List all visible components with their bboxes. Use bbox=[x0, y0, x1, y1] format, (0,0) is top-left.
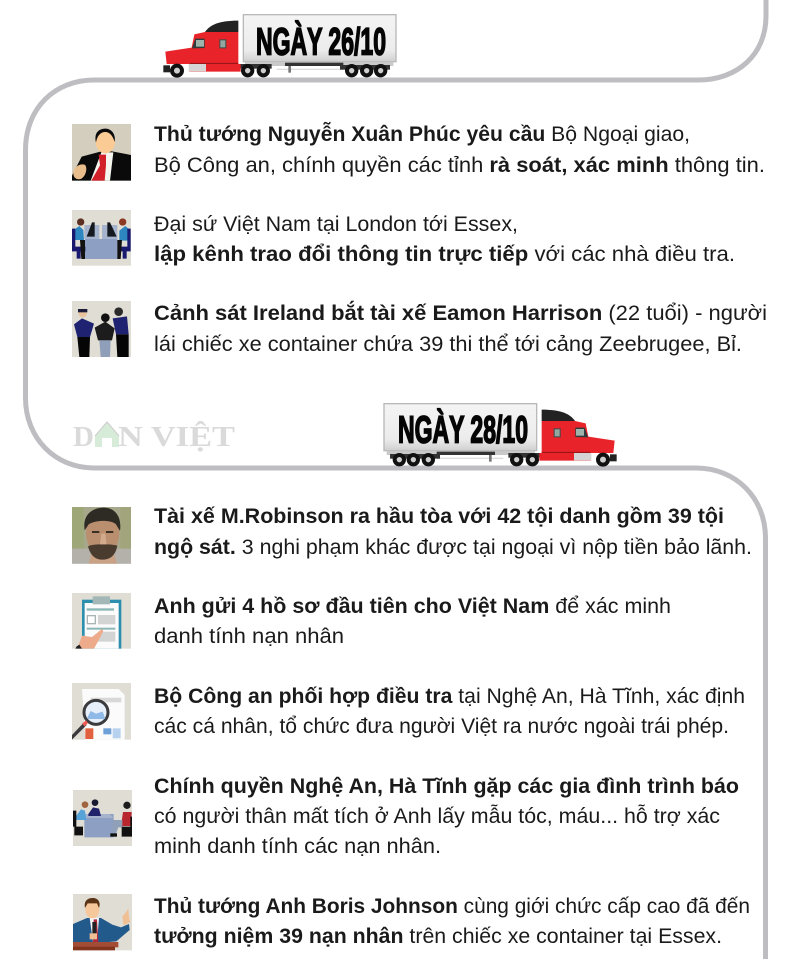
text: cảnh sát ireland bbox=[154, 300, 767, 356]
text: thủ tướng yêu cầu: Thủ tướng Nguyễn Xuân Phúc yêu cầu Bộ Ngoại giao, bbox=[154, 121, 690, 146]
text: đại sứ việt nam bbox=[154, 212, 735, 266]
text: chính quyền nghệ an bbox=[154, 774, 739, 858]
icon: meeting with families bbox=[73, 790, 132, 846]
icon: Boris Johnson speaking bbox=[73, 894, 132, 950]
text: anh gửi 4 hồ sơ bbox=[154, 594, 671, 648]
icon: prime minister in suit bbox=[72, 124, 131, 181]
text: cảnh sát ireland: Cảnh sát Ireland bắt tài xế Eamon Harrison (22 tuổi) - người bbox=[154, 300, 767, 325]
text: tài xế M.Robinson: Tài xế M.Robinson ra hầu tòa với 42 tội danh gồm 39 tội bbox=[154, 504, 724, 528]
truck: ngày 28/10 bbox=[384, 404, 617, 467]
text: thủ tướng anh: Thủ tướng Anh Boris Johnson cùng giới chức cấp cao đã đến bbox=[154, 894, 750, 918]
watermark: Dân Việt bbox=[73, 420, 235, 453]
icon: magnifier over document bbox=[72, 683, 131, 740]
text: thủ tướng anh: tưởng niệm 39 nạn nhân trên chiếc xe container tại Essex. bbox=[154, 924, 722, 948]
text: thủ tướng yêu cầu bbox=[154, 121, 765, 177]
text: tài xế M.Robinson: ngộ sát. 3 nghi phạm khác được tại ngoại vì nộp tiền bảo lãnh. bbox=[154, 535, 752, 559]
text: tài xế M.Robinson bbox=[154, 504, 752, 559]
text: anh gửi 4 hồ sơ: Anh gửi 4 hồ sơ đầu tiên cho Việt Nam để xác minh bbox=[154, 594, 671, 618]
watermark: Dân Việt: N VIỆT bbox=[118, 420, 235, 453]
text: cảnh sát ireland: lái chiếc xe container chứa 39 thi thể tới cảng Zeebrugee, Bỉ. bbox=[154, 332, 742, 356]
truck: ngày 26/10 bbox=[163, 15, 396, 78]
text: đại sứ việt nam: lập kênh trao đổi thông tin trực tiếp với các nhà điều tra. bbox=[154, 242, 735, 266]
text: anh gửi 4 hồ sơ: danh tính nạn nhân bbox=[154, 624, 344, 648]
icon: portrait of M.Robinson bbox=[72, 507, 131, 564]
text: đại sứ việt nam: Đại sứ Việt Nam tại London tới Essex, bbox=[154, 212, 518, 236]
truck label: NGÀY 26/10 bbox=[256, 20, 386, 64]
watermark: Dân Việt: D bbox=[73, 421, 94, 453]
text: chính quyền nghệ an: Chính quyền Nghệ An, Hà Tĩnh gặp các gia đình trình báo bbox=[154, 774, 739, 798]
text: chính quyền nghệ an: có người thân mất tích ở Anh lấy mẫu tóc, máu... hỗ trợ xác bbox=[154, 803, 720, 828]
truck label: NGÀY 28/10 bbox=[398, 408, 528, 452]
text: bộ công an phối hợp bbox=[154, 684, 745, 738]
text: bộ công an phối hợp: Bộ Công an phối hợp điều tra tại Nghệ An, Hà Tĩnh, xác định bbox=[154, 684, 745, 708]
text: thủ tướng anh bbox=[154, 894, 750, 948]
text: thủ tướng yêu cầu: Bộ Công an, chính quyền các tỉnh rà soát, xác minh thông tin. bbox=[154, 153, 765, 177]
text: bộ công an phối hợp: các cá nhân, tổ chức đưa người Việt ra nước ngoài trái phép. bbox=[154, 714, 729, 738]
icon: clipboard files bbox=[72, 593, 131, 649]
icon: embassy officers at desks bbox=[72, 210, 131, 266]
icon: police arrest driver bbox=[72, 301, 131, 357]
text: chính quyền nghệ an: minh danh tính các nạn nhân. bbox=[154, 834, 441, 858]
